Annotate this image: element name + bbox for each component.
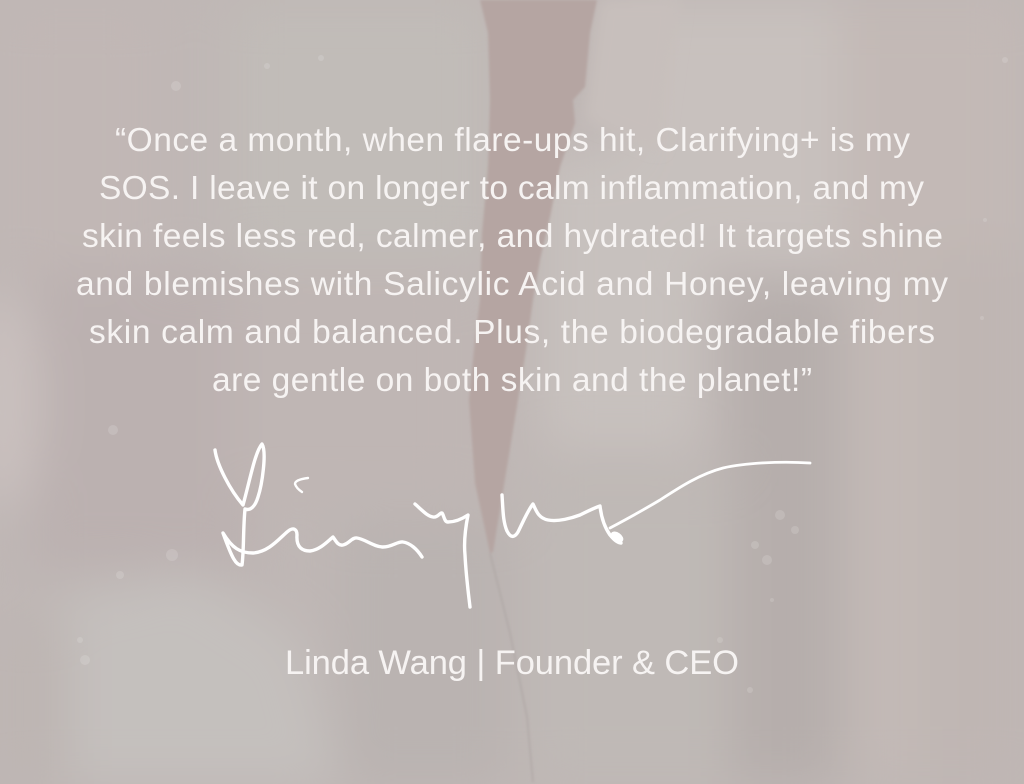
quote text: SOS. I leave it on longer to calm inflammation, and my [99, 170, 924, 207]
quote text: “Once a month, when flare-ups hit, Clarifying+ is my [115, 122, 910, 159]
sparkles [77, 55, 1008, 693]
quote text: and blemishes with Salicylic Acid and Honey, leaving my [76, 266, 948, 303]
attribution: Linda Wang | Founder & CEO [285, 644, 739, 682]
central pink fissure [469, 0, 597, 552]
quote text: skin calm and balanced. Plus, the biodegradable fibers [89, 314, 935, 351]
quote text: are gentle on both skin and the planet!” [212, 362, 812, 399]
quote text: skin feels less red, calmer, and hydrated! It targets shine [82, 218, 943, 255]
